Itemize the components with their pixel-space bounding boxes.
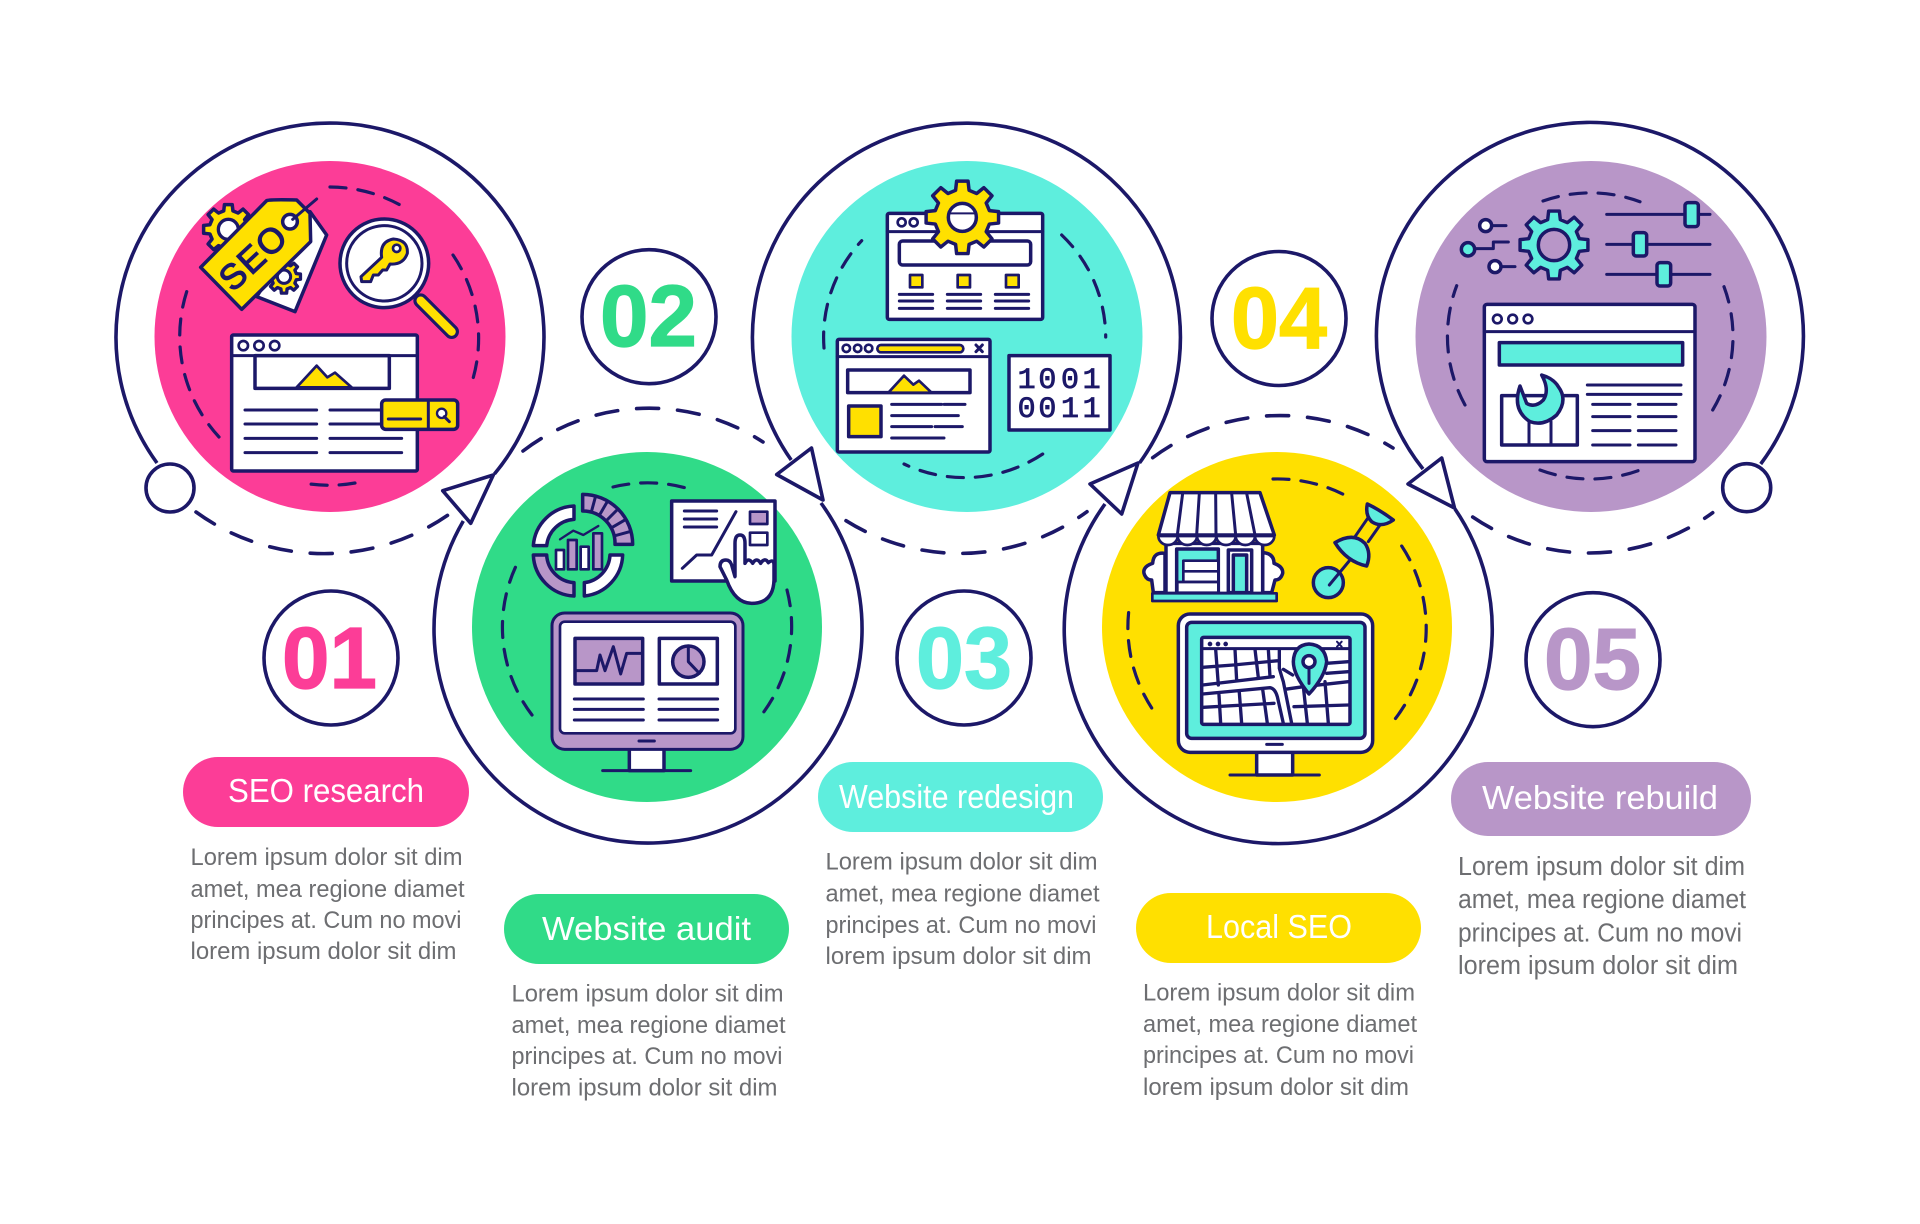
number badge 01	[264, 591, 398, 725]
description text 3: amet, mea regione diamet	[826, 880, 1100, 908]
description text 2: Lorem ipsum dolor sit dim	[512, 980, 784, 1008]
number badge 05: 05	[1544, 611, 1641, 708]
icon: desktop monitor dashboard	[552, 613, 743, 771]
inner dashed ring 4	[1128, 479, 1426, 722]
icon: top browser window with gear	[887, 181, 1043, 319]
outer ring 5	[1376, 122, 1803, 469]
icon: website audit illustration	[533, 494, 775, 771]
description text 4: lorem ipsum dolor sit dim	[1143, 1074, 1409, 1101]
panel: 04 Local SEO	[1064, 252, 1492, 1101]
panel: 05 Website rebuild	[1376, 122, 1803, 980]
icon: gear behind tag	[204, 205, 253, 254]
pill label: Website redesign: Website redesign	[839, 778, 1074, 815]
number badge 03	[897, 591, 1031, 725]
pill label: Local SEO	[1136, 893, 1421, 963]
pill label: Website audit	[504, 894, 789, 964]
description text 2: amet, mea regione diamet	[512, 1012, 786, 1039]
number badge 02	[582, 250, 716, 384]
pill label: Website rebuild: Website rebuild	[1482, 779, 1718, 816]
icon: website redesign illustration	[837, 181, 1110, 452]
panel: 03 Website redesign	[752, 123, 1180, 970]
description text 3: lorem ipsum dolor sit dim	[826, 943, 1092, 970]
icon: browser window with wrench	[1484, 304, 1695, 462]
start node circle	[146, 464, 194, 512]
outer ring 1	[116, 123, 544, 474]
icon: lower browser window	[837, 339, 990, 452]
pill label: SEO research	[183, 757, 469, 827]
icon: SEO price tag: SEO	[212, 217, 296, 299]
outer ring 3	[752, 123, 1180, 463]
icon: storefront	[1144, 493, 1283, 601]
pill label: SEO research: SEO research	[228, 772, 424, 809]
icon: search box	[382, 400, 458, 429]
arrow: step 4 to 5	[1408, 458, 1454, 508]
icon: binary code card	[1009, 356, 1110, 430]
end node circle	[1723, 464, 1771, 512]
icon: browser window	[232, 335, 417, 471]
icon: magnifier with key	[340, 219, 452, 332]
description text 1: amet, mea regione diamet	[190, 876, 465, 903]
pill label: Local SEO: Local SEO	[1206, 908, 1352, 945]
pill label: Website redesign	[818, 762, 1103, 832]
description text 5	[1458, 853, 1746, 980]
description text 4: Lorem ipsum dolor sit dim	[1143, 980, 1415, 1006]
number badge 04	[1212, 252, 1346, 386]
dashed connector 5	[1473, 513, 1713, 553]
icon: small gear on back tag	[268, 260, 300, 293]
outer ring 4	[1064, 504, 1492, 844]
description text 2: lorem ipsum dolor sit dim	[512, 1074, 778, 1102]
description text 1: principes at. Cum no movi	[190, 907, 462, 934]
icon: chart card	[672, 501, 775, 581]
icon: donut chart with bars	[533, 494, 633, 596]
icon: circuit nodes	[1461, 220, 1515, 273]
description text 3: Lorem ipsum dolor sit dim	[826, 848, 1098, 876]
cyan disc	[792, 161, 1142, 512]
description text 3: principes at. Cum no movi	[826, 912, 1096, 939]
pill label: Website audit: Website audit	[542, 910, 751, 947]
inner dashed ring 5	[1447, 193, 1733, 479]
description text 2	[512, 980, 786, 1102]
number badge 02: 02	[600, 268, 697, 365]
dashed connector 3	[846, 512, 1087, 553]
inner dashed ring 1	[180, 187, 479, 485]
yellow disc	[1102, 452, 1452, 802]
number badge 04: 04	[1231, 270, 1327, 367]
dashed connector 1	[196, 512, 448, 554]
green disc	[472, 452, 822, 802]
purple disc	[1416, 161, 1766, 512]
description text 5: Lorem ipsum dolor sit dim	[1458, 853, 1745, 881]
icon: SEO price tag	[201, 199, 317, 309]
description text 5: amet, mea regione diamet	[1458, 886, 1746, 914]
arrow: step 2 to 3	[777, 448, 823, 500]
inner dashed ring 2	[502, 483, 792, 715]
icon: binary code card: 0011	[1018, 393, 1101, 427]
number badge 03: 03	[916, 610, 1012, 707]
icon: white back tag	[257, 212, 327, 312]
icon: website rebuild illustration	[1461, 203, 1710, 462]
inner dashed ring 3	[824, 235, 1106, 478]
icon: pointing hand	[720, 535, 774, 603]
icon: push pin	[1313, 504, 1393, 598]
icon: sliders	[1607, 203, 1710, 286]
dashed connector 4	[1153, 416, 1393, 458]
description text 3	[826, 848, 1100, 970]
description text 4: principes at. Cum no movi	[1143, 1042, 1414, 1069]
number badge 05	[1526, 593, 1660, 727]
description text 5: lorem ipsum dolor sit dim	[1458, 952, 1738, 980]
panel: 02 Website audit	[434, 250, 862, 1102]
icon: binary code card: 1001	[1018, 364, 1101, 398]
description text 4: amet, mea regione diamet	[1143, 1011, 1417, 1038]
description text 5: principes at. Cum no movi	[1458, 920, 1742, 948]
description text 1	[190, 844, 465, 965]
dashed connector 2	[523, 408, 763, 451]
arrow: step 1 to 2	[443, 475, 493, 523]
icon: settings gear	[1520, 211, 1588, 279]
description text 1: lorem ipsum dolor sit dim	[190, 938, 456, 965]
pill label: Website rebuild	[1451, 762, 1751, 836]
panel: 01 SEO research	[116, 123, 544, 965]
description text 2: principes at. Cum no movi	[512, 1043, 782, 1070]
description text 4	[1143, 980, 1417, 1101]
description text 1: Lorem ipsum dolor sit dim	[190, 844, 462, 871]
icon: desktop monitor with map	[1178, 614, 1373, 775]
icon: local SEO illustration	[1144, 493, 1393, 775]
arrow: step 3 to 4	[1090, 463, 1138, 514]
pink disc	[154, 161, 506, 512]
icon: SEO research illustration	[201, 199, 458, 471]
outer ring 2	[434, 503, 862, 843]
number badge 01: 01	[282, 610, 377, 707]
